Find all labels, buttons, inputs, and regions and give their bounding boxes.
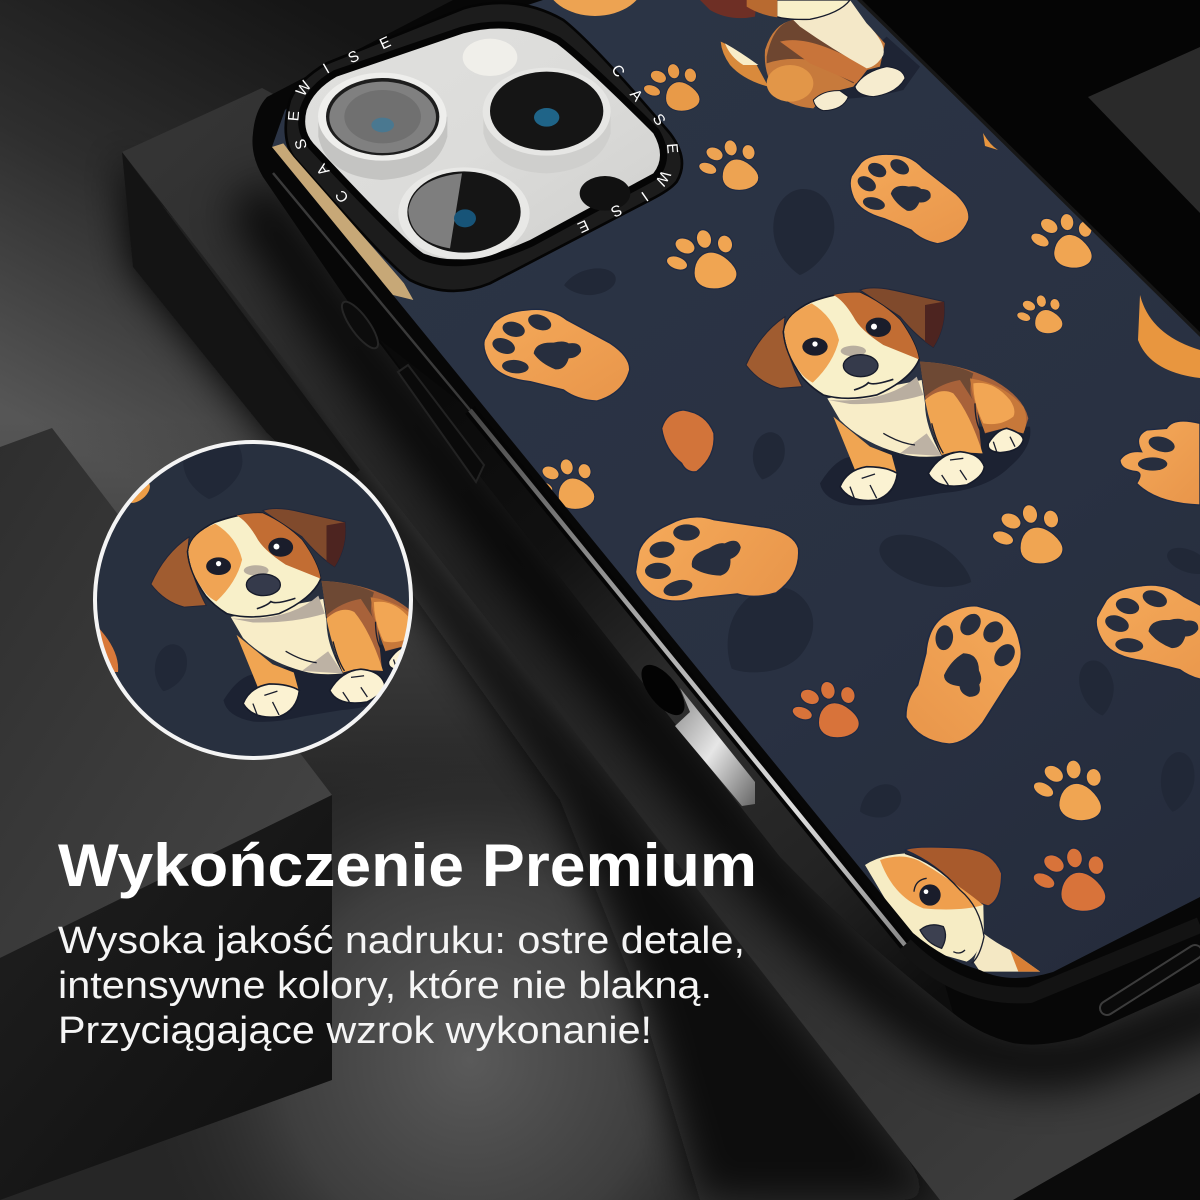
CASEWISE lettering: E <box>377 34 394 53</box>
phone case body <box>252 0 1200 1045</box>
top dog <box>700 0 920 111</box>
CASEWISE lettering: A <box>626 86 646 106</box>
flash <box>463 39 517 76</box>
orange blob <box>662 410 714 472</box>
CASEWISE lettering: W <box>651 167 674 189</box>
CASEWISE lettering: E <box>285 110 303 122</box>
camera window <box>305 28 660 259</box>
partial paw on right edge <box>1120 421 1200 505</box>
small paw prints <box>533 62 1110 913</box>
CASEWISE lettering: S <box>292 137 311 151</box>
main dog <box>746 288 1030 505</box>
lens top right <box>483 68 611 173</box>
title: Wykończenie Premium <box>58 832 757 899</box>
body text: intensywne kolory, które nie blakną. <box>58 965 712 1007</box>
body text <box>58 920 745 1052</box>
CASEWISE lettering: A <box>313 160 333 179</box>
CASEWISE lettering: W <box>293 78 315 100</box>
large paw prints <box>484 149 1200 748</box>
case rim highlights <box>273 0 1200 995</box>
CASEWISE lettering: E <box>663 143 681 154</box>
phone side facet <box>380 340 953 1013</box>
body text: Wysoka jakość nadruku: ostre detale, <box>58 920 745 962</box>
printed back panel with dog pattern <box>272 0 1200 978</box>
side buttons and ports <box>336 297 1195 1008</box>
circular detail inset <box>95 431 430 758</box>
CASEWISE lettering: I <box>638 188 651 204</box>
dark paw shadows <box>562 189 1200 827</box>
lens top left <box>318 73 447 180</box>
lens bottom <box>398 167 530 259</box>
CASEWISE lettering: C <box>608 62 628 81</box>
microphone hole <box>580 176 630 211</box>
CASEWISE lettering: C <box>332 187 352 206</box>
CASEWISE lettering: S <box>608 200 625 220</box>
CASEWISE lettering: S <box>649 111 669 129</box>
CASEWISE lettering: E <box>575 216 591 236</box>
partial orange shapes at right edge <box>983 133 1200 378</box>
CASEWISE lettering: I <box>320 61 333 77</box>
bottom dog <box>865 847 1040 972</box>
CASEWISE lettering <box>285 34 681 236</box>
camera island <box>272 3 682 300</box>
tan print strip under frame <box>272 143 413 300</box>
paw at top edge <box>554 0 636 16</box>
CASEWISE lettering: S <box>345 48 362 67</box>
body text: Przyciągające wzrok wykonanie! <box>58 1010 652 1052</box>
